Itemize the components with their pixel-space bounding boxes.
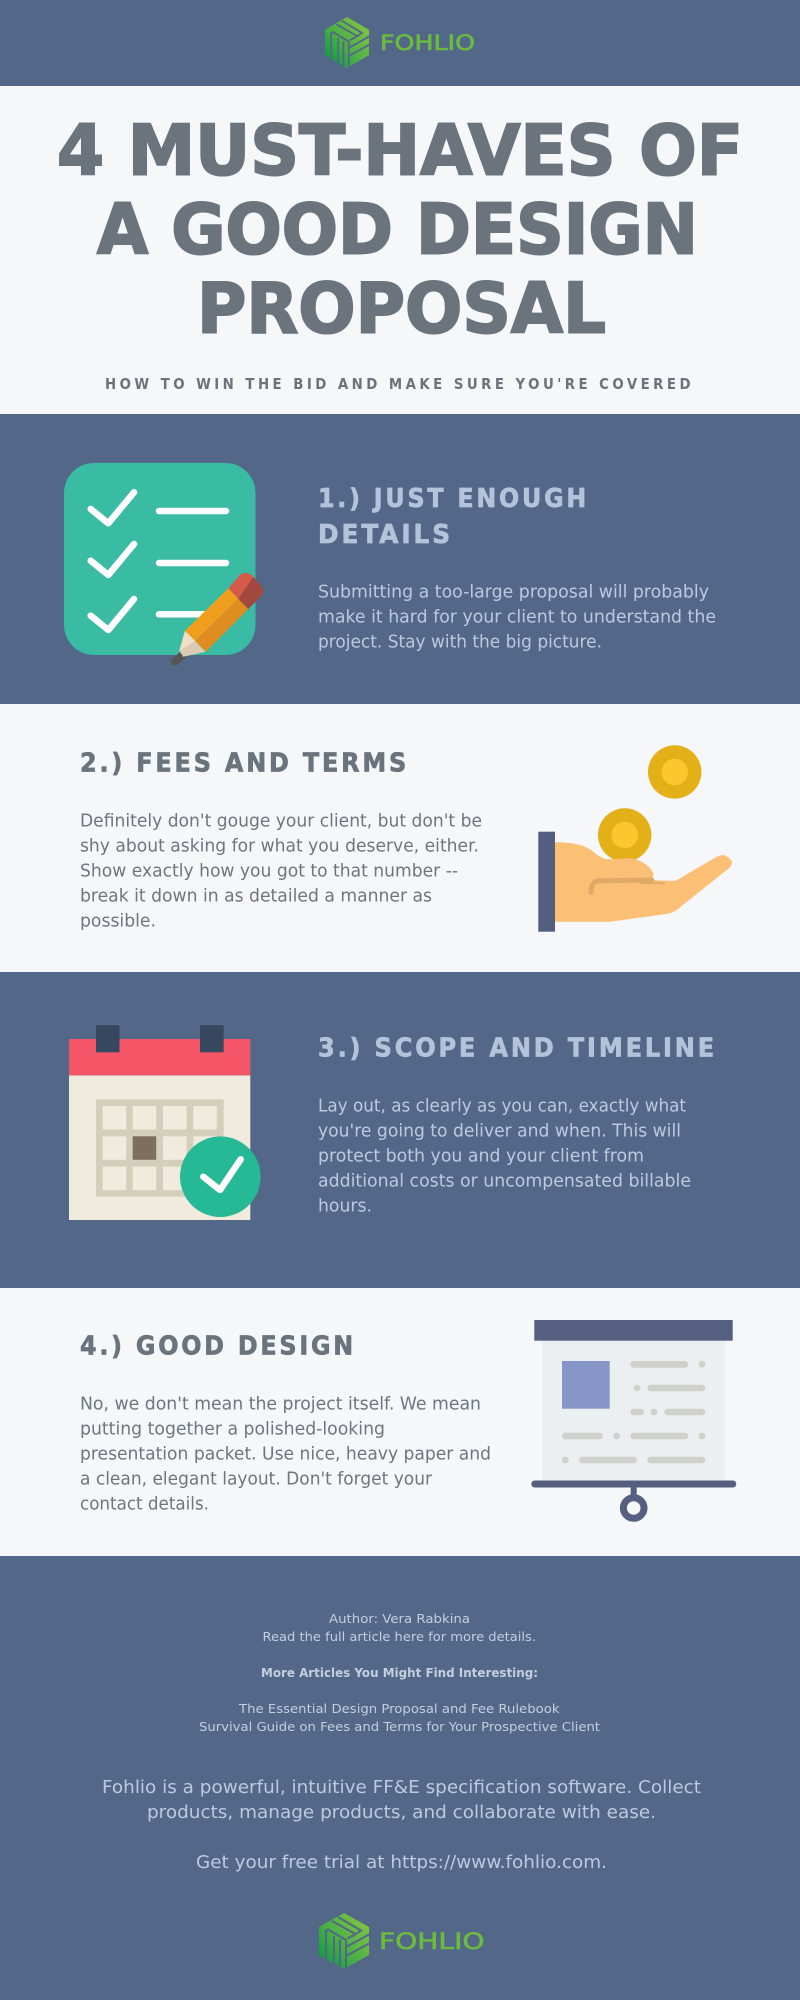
body text: No, we don't mean the project itself. We mean	[80, 1393, 481, 1414]
body text: contact details.	[80, 1493, 209, 1514]
author credit: Read the full article here for more details.	[262, 1630, 536, 1645]
logo mark	[325, 17, 370, 69]
logo: Fohlio header	[325, 17, 475, 69]
body text: Submitting a too-large proposal will probably	[318, 582, 709, 602]
body text: a clean, elegant layout. Don't forget your	[80, 1468, 433, 1489]
heading: DETAILS	[318, 520, 453, 550]
body text	[318, 1096, 691, 1217]
icon: presentation screen	[531, 1320, 736, 1518]
header band	[0, 0, 800, 86]
more articles heading: More Articles You Might Find Interesting:	[261, 1666, 538, 1681]
title: A GOOD DESIGN	[97, 190, 698, 270]
logo wordmark: FOHLIO	[380, 31, 475, 55]
heading: 2.) FEES AND TERMS	[80, 749, 409, 779]
related articles: The Essential Design Proposal and Fee Rulebook	[238, 1702, 560, 1717]
panel: section 2 fees and terms	[0, 704, 800, 972]
panel: title	[0, 86, 800, 414]
heading: 4.) GOOD DESIGN	[80, 1331, 356, 1361]
body text: putting together a polished-looking	[80, 1418, 385, 1439]
body text: protect both you and your client from	[318, 1146, 644, 1167]
body text: break it down in as detailed a manner as	[80, 886, 432, 907]
logo wordmark: FOHLIO	[379, 1929, 484, 1955]
body text	[80, 811, 482, 932]
company description: products, manage products, and collaborate with ease.	[147, 1802, 656, 1823]
icon: calendar with check	[69, 1025, 261, 1220]
related articles: Survival Guide on Fees and Terms for Your Prospective Client	[199, 1720, 600, 1735]
panel: section 1 just enough details	[0, 414, 800, 704]
body text: Lay out, as clearly as you can, exactly what	[318, 1096, 686, 1117]
company description	[102, 1777, 701, 1823]
logo: Fohlio footer	[319, 1913, 484, 1970]
related articles	[199, 1702, 600, 1735]
heading: 1.) JUST ENOUGH	[318, 484, 589, 514]
call to action: Get your free trial at https://www.fohlio.com.	[196, 1852, 607, 1873]
body text: Show exactly how you got to that number --	[80, 861, 458, 882]
icon: checklist with pencil	[64, 463, 263, 662]
body text: you're going to deliver and when. This will	[318, 1121, 681, 1142]
panel: section 3 scope and timeline	[0, 972, 800, 1288]
body text: Definitely don't gouge your client, but don't be	[80, 811, 482, 832]
body text: possible.	[80, 911, 156, 932]
heading: 3.) SCOPE AND TIMELINE	[318, 1034, 717, 1064]
title: 4 MUST-HAVES OF	[57, 110, 743, 192]
body text: shy about asking for what you deserve, either.	[80, 836, 479, 857]
heading	[318, 484, 589, 550]
logo mark	[319, 1913, 370, 1970]
body text: project. Stay with the big picture.	[318, 632, 602, 652]
body text	[318, 582, 716, 652]
company description: Fohlio is a powerful, intuitive FF&E specification software. Collect	[102, 1777, 701, 1798]
icon: hand with coins	[538, 745, 732, 932]
author credit	[262, 1612, 536, 1645]
author credit: Author: Vera Rabkina	[329, 1612, 470, 1627]
body text: hours.	[318, 1196, 372, 1217]
body text: presentation packet. Use nice, heavy paper and	[80, 1443, 491, 1464]
body text: additional costs or uncompensated billable	[318, 1171, 691, 1192]
subtitle: HOW TO WIN THE BID AND MAKE SURE YOU'RE COVERED	[105, 375, 694, 393]
panel: section 4 good design	[0, 1288, 800, 1556]
title: PROPOSAL	[197, 268, 606, 350]
body text: make it hard for your client to understand the	[318, 606, 716, 628]
panel: footer	[0, 1556, 800, 2000]
body text	[80, 1393, 491, 1514]
title	[57, 110, 743, 350]
